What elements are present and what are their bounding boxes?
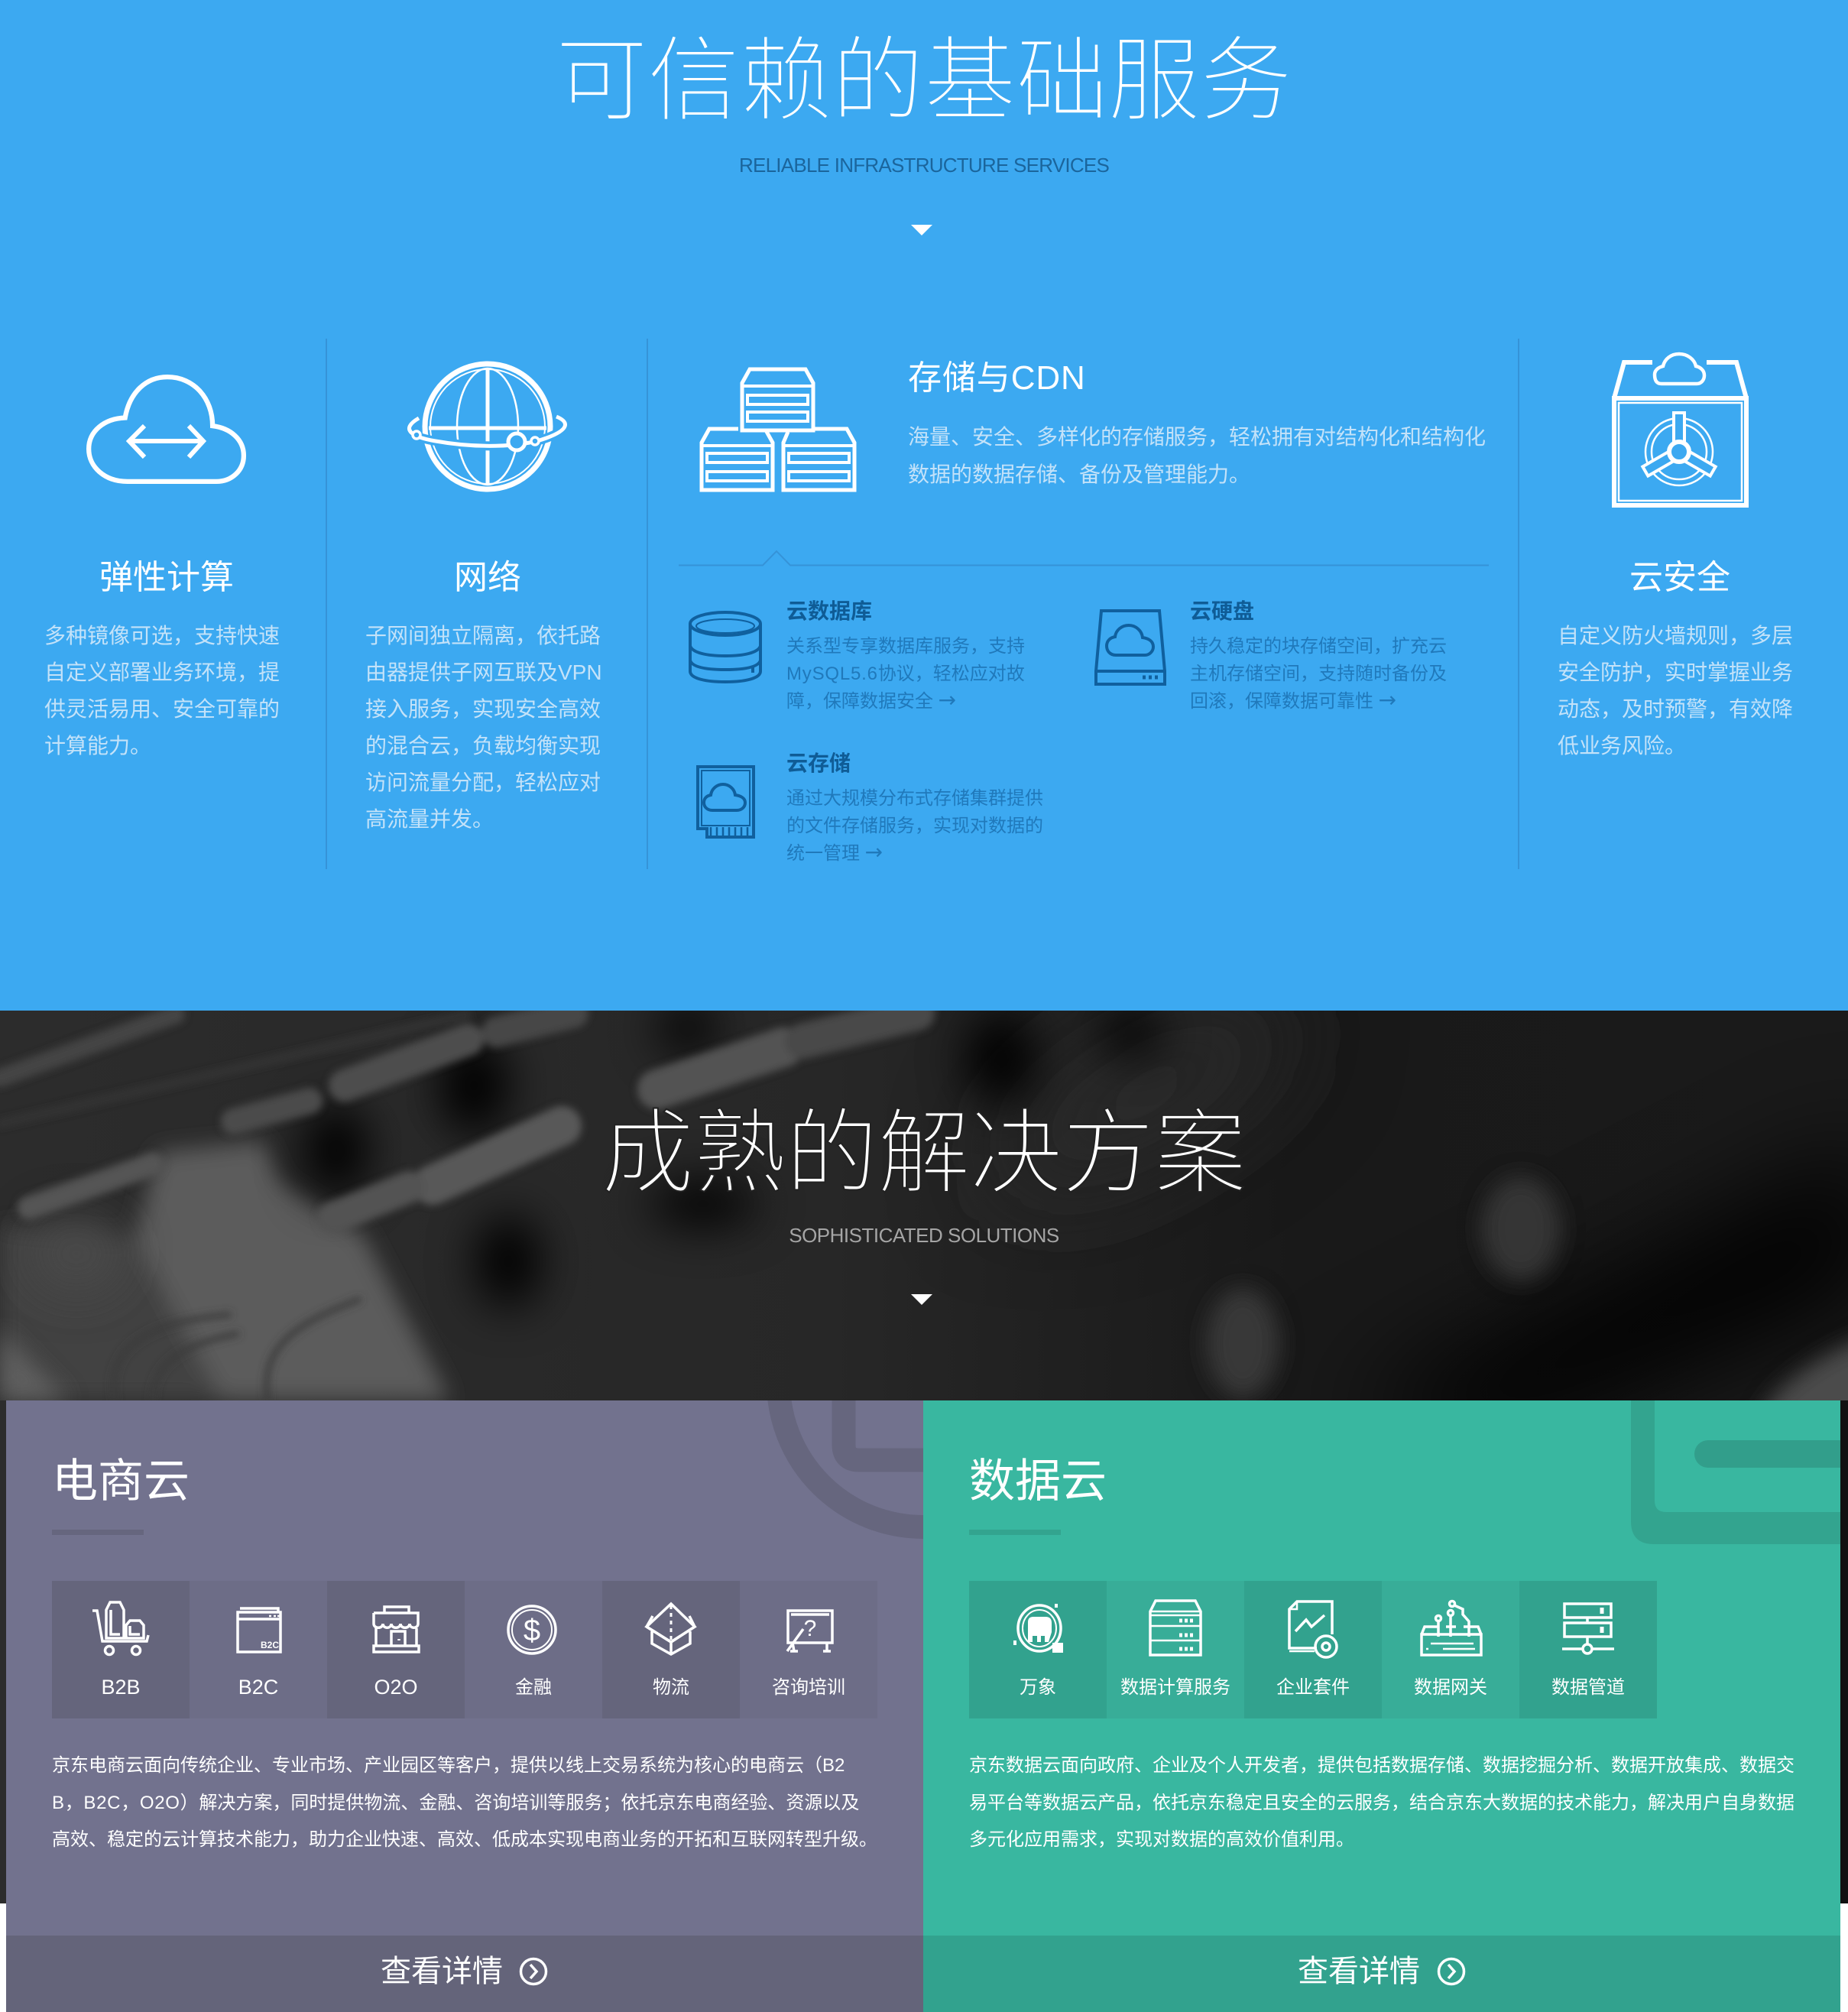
- heading: 云安全: [1629, 559, 1730, 596]
- tile: Wanxiang: [969, 1581, 1107, 1718]
- description: 访问流量分配，轻松应对: [365, 771, 601, 794]
- link text: 查看详情: [1298, 1955, 1420, 1988]
- icon: browser window: B2C: [261, 1640, 279, 1650]
- icon: circled chevron: [1436, 1956, 1467, 1987]
- tile: B2B: [52, 1581, 190, 1718]
- icon: circled chevron: [518, 1956, 549, 1987]
- panel: data cloud: [923, 1400, 1840, 2012]
- description: 海量、安全、多样化的存储服务，轻松拥有对结构化和结构化: [908, 425, 1486, 449]
- label: 数据计算服务: [1120, 1677, 1230, 1698]
- icon: connected servers: [1562, 1602, 1614, 1654]
- icon: cart: [92, 1601, 150, 1656]
- description: 多元化应用需求，实现对数据的高效价值利用。: [969, 1829, 1354, 1850]
- label: B2C: [238, 1676, 278, 1699]
- icon: board with question: [786, 1609, 834, 1652]
- section: reliable infrastructure services: [0, 0, 1848, 1011]
- tile: B2C: [190, 1581, 327, 1718]
- service tiles: [52, 1581, 845, 1718]
- icon: safe with cloud: [1612, 352, 1749, 508]
- subtitle: RELIABLE INFRASTRUCTURE SERVICES: [739, 154, 1109, 177]
- footer: view details: [6, 1936, 923, 2012]
- description: 接入服务，实现安全高效: [365, 697, 601, 721]
- item description: 关系型专享数据库服务，支持: [786, 636, 1025, 657]
- label: 数据管道: [1551, 1677, 1625, 1698]
- blurred photo background: [0, 1011, 1848, 1986]
- label: 企业套件: [1276, 1677, 1350, 1698]
- description: 供灵活易用、安全可靠的: [44, 697, 280, 721]
- item description: [786, 788, 1043, 865]
- icon: dollar coin: [507, 1605, 557, 1655]
- label: O2O: [374, 1676, 418, 1699]
- description: [365, 624, 602, 831]
- icon: elephant ring: [1013, 1604, 1065, 1654]
- section: sophisticated solutions: [0, 1011, 1848, 1903]
- tile: finance: [465, 1581, 602, 1718]
- label: 万象: [1020, 1677, 1056, 1698]
- item description: 的文件存储服务，实现对数据的: [786, 816, 1043, 836]
- tile: data compute: [1107, 1581, 1244, 1718]
- description: 安全防护，实时掌握业务: [1558, 660, 1793, 684]
- divider with notch: [679, 550, 1489, 566]
- heading: 弹性计算: [99, 559, 234, 596]
- link text: 查看详情: [381, 1955, 503, 1988]
- heading: 电商云: [52, 1455, 190, 1507]
- description: 高流量并发。: [365, 807, 494, 831]
- panel: cloud security: [1558, 352, 1793, 758]
- icon: disk drive: [1094, 609, 1166, 686]
- description: 京东电商云面向传统企业、专业市场、产业园区等客户，提供以线上交易系统为核心的电商云（B2: [52, 1755, 845, 1776]
- description: 数据的数据存储、备份及管理能力。: [908, 462, 1250, 486]
- icon: open box: [645, 1602, 697, 1656]
- item description: MySQL5.6协议，轻松应对故: [786, 664, 1025, 684]
- label: 数据网关: [1414, 1677, 1487, 1698]
- label: B2B: [101, 1676, 141, 1699]
- item: cloud database: [689, 599, 1025, 712]
- description: [969, 1748, 1795, 1859]
- description: [44, 624, 280, 758]
- item description: 通过大规模分布式存储集群提供: [786, 788, 1043, 809]
- description: [52, 1748, 877, 1859]
- icon: memory card: [696, 765, 755, 839]
- icon: board with question: ?: [804, 1616, 816, 1641]
- item title: 云数据库: [786, 599, 872, 623]
- icon: browser window: [236, 1607, 282, 1653]
- item: cloud storage: [696, 751, 1043, 865]
- tile: data gateway: [1382, 1581, 1519, 1718]
- description: 子网间独立隔离，依托路: [365, 624, 601, 647]
- title: 成熟的解决方案: [601, 1102, 1247, 1205]
- description: 的混合云，负载均衡实现: [365, 734, 601, 758]
- heading: 存储与CDN: [908, 359, 1086, 397]
- icon: dollar coin: $: [524, 1614, 540, 1647]
- label: 金融: [515, 1677, 552, 1698]
- item description: 主机存储空间，支持随时备份及: [1190, 664, 1447, 684]
- tile: consulting: [740, 1581, 877, 1718]
- item title: 云存储: [786, 751, 851, 775]
- description: 低业务风险。: [1558, 734, 1686, 758]
- icon: document chart: [1288, 1601, 1339, 1657]
- title: 可信赖的基础服务: [556, 29, 1292, 132]
- decorative watermark: [767, 1400, 923, 1539]
- description: [908, 425, 1486, 486]
- footer: view details: [923, 1936, 1840, 2012]
- description: 自定义部署业务环境，提: [44, 660, 280, 684]
- description: [1558, 624, 1793, 758]
- description: 高效、稳定的云计算技术能力，助力企业快速、高效、低成本实现电商业务的开拓和互联网转型升级。: [52, 1829, 877, 1850]
- icon: server rack: [1149, 1600, 1202, 1657]
- subtitle: SOPHISTICATED SOLUTIONS: [789, 1224, 1059, 1247]
- tile: enterprise suite: [1244, 1581, 1382, 1718]
- item description: 障，保障数据安全 →: [786, 687, 956, 712]
- item description: 统一管理 →: [786, 839, 883, 865]
- item description: [1190, 636, 1447, 712]
- panel: network: [365, 361, 602, 831]
- description: 自定义防火墙规则，多层: [1558, 624, 1793, 647]
- item description: [786, 636, 1025, 712]
- icon: cloud with arrows: [86, 375, 246, 484]
- panel: storage and CDN: [679, 359, 1489, 865]
- tile: logistics: [602, 1581, 740, 1718]
- description: 易平台等数据云产品，依托京东稳定且安全的云服务，结合京东大数据的技术能力，解决用户自身数据: [969, 1792, 1795, 1813]
- icon: database: [689, 611, 762, 683]
- icon: server stack: [700, 367, 856, 492]
- heading: 数据云: [969, 1455, 1107, 1507]
- icon: globe with orbit: [407, 361, 567, 492]
- icon: store: [372, 1605, 420, 1653]
- description: B，B2C，O2O）解决方案，同时提供物流、金融、咨询培训等服务；依托京东电商经验、资源以及: [52, 1792, 859, 1813]
- icon: down arrow: [911, 225, 932, 235]
- label: 物流: [653, 1677, 689, 1698]
- item description: 持久稳定的块存储空间，扩充云: [1190, 636, 1447, 657]
- icon: down arrow: [911, 1294, 932, 1305]
- description: 多种镜像可选，支持快速: [44, 624, 280, 647]
- tile: O2O: [327, 1581, 465, 1718]
- description: 京东数据云面向政府、企业及个人开发者，提供包括数据存储、数据挖掘分析、数据开放集成、数据交: [969, 1755, 1795, 1776]
- heading: 网络: [454, 559, 521, 596]
- decorative watermark: [923, 1400, 1840, 1553]
- tile: data pipeline: [1519, 1581, 1657, 1718]
- description: 由器提供子网互联及VPN: [365, 660, 602, 684]
- description: 动态，及时预警，有效降: [1558, 697, 1793, 721]
- item description: 回滚，保障数据可靠性 →: [1190, 687, 1396, 712]
- panel: elastic compute: [44, 375, 280, 758]
- label: 咨询培训: [772, 1677, 845, 1698]
- icon: gateway box: [1420, 1601, 1483, 1657]
- description: 计算能力。: [44, 734, 151, 758]
- item: cloud disk: [1094, 599, 1447, 712]
- service tiles: [969, 1581, 1657, 1718]
- item title: 云硬盘: [1190, 599, 1254, 623]
- panel: e-commerce cloud: [6, 1400, 923, 2012]
